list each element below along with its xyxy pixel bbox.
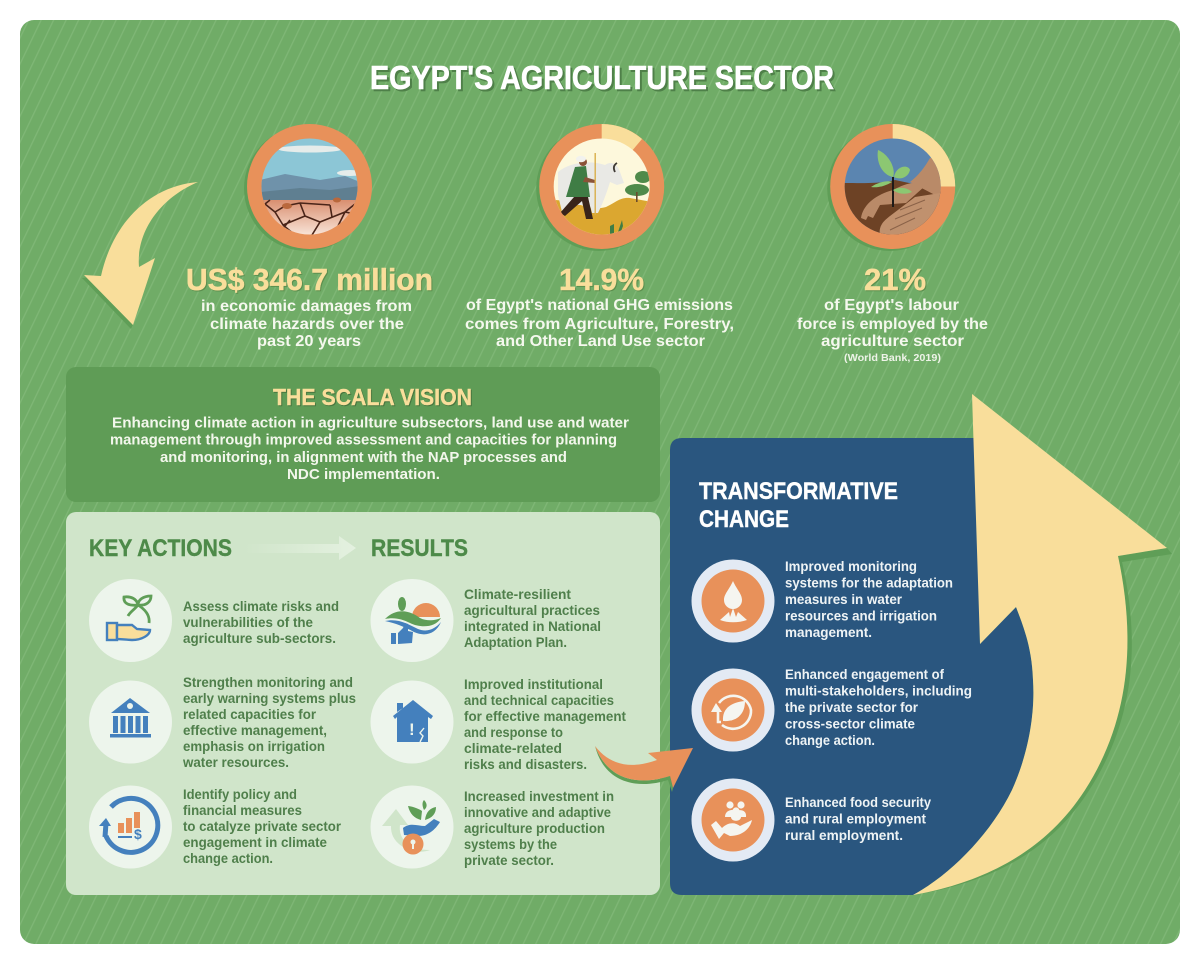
result 1 text: agricultural practices xyxy=(464,603,600,618)
action 3 text: Identify policy and xyxy=(183,787,297,802)
stat 3: text xyxy=(797,262,988,364)
transformative item 1 text: resources and irrigation xyxy=(785,608,937,624)
stat 2: text xyxy=(465,262,734,350)
action 1 text: Assess climate risks and xyxy=(183,599,339,614)
stat 1: climate damage photo ring xyxy=(244,124,372,251)
transformative item 3 text: Enhanced food security xyxy=(785,795,932,810)
result 2 text: Improved institutional xyxy=(464,677,603,692)
icon: house with alert xyxy=(370,680,454,764)
transformative item 3 text: and rural employment xyxy=(785,812,927,826)
panel: the SCALA vision: Enhancing climate action in agriculture subsectors, land use and water xyxy=(112,414,629,432)
stat 3: text: (World Bank, 2019) xyxy=(844,353,941,364)
action 1 text xyxy=(183,599,339,646)
panel: the SCALA vision: NDC implementation. xyxy=(287,466,440,483)
panel: transformative change: TRANSFORMATIVE xyxy=(699,478,898,505)
stat 2: herder and ox ring xyxy=(536,124,664,251)
heading: results: RESULTS xyxy=(371,535,468,562)
title: EGYPT'S AGRICULTURE SECTOR xyxy=(370,59,834,96)
arrow: large yellow upward curved arrow xyxy=(913,394,1172,895)
stat 3: text: force is employed by the xyxy=(797,316,988,333)
result 3 text xyxy=(464,789,614,868)
result 3 text: innovative and adaptive xyxy=(464,805,611,820)
icon: hand with seedling xyxy=(89,579,172,662)
stat 2: text: comes from Agriculture, Forestry, xyxy=(465,316,734,333)
action 2 text: effective management, xyxy=(183,723,327,738)
icon: water drop and grass xyxy=(692,560,774,642)
icon: investment hand with plant xyxy=(370,786,454,868)
stat 1: text: US$ 346.7 million xyxy=(187,263,434,298)
title: EGYPT'S AGRICULTURE SECTOR xyxy=(372,61,836,98)
action 2 text: water resources. xyxy=(182,755,289,770)
transformative item 2 text: the private sector for xyxy=(785,700,919,715)
icon: institution building xyxy=(89,680,172,764)
action 3 text xyxy=(183,787,342,866)
action 3 text: financial measures xyxy=(183,803,302,818)
stat 3: text: of Egypt's labour xyxy=(824,297,959,314)
stat 2: text: and Other Land Use sector xyxy=(496,333,705,350)
transformative item 1 text: measures in water xyxy=(785,592,903,607)
stat 1: text: in economic damages from xyxy=(201,298,412,315)
result 3 text: Increased investment in xyxy=(464,789,614,804)
transformative item 1 text: Improved monitoring xyxy=(785,559,917,574)
icon: finance cycle chart xyxy=(89,786,172,868)
result 2 text: risks and disasters. xyxy=(464,757,587,772)
icon: people in hand xyxy=(692,778,774,862)
transformative item 2 text: change action. xyxy=(785,733,875,748)
result 1 text: Adaptation Plan. xyxy=(464,635,567,650)
action 1 text: vulnerabilities of the xyxy=(183,615,313,630)
transformative item 3 text: rural employment. xyxy=(785,828,903,843)
transformative item 1 text: management. xyxy=(785,625,872,640)
stat 1: text xyxy=(186,262,434,350)
arrow: yellow down-left curved arrow xyxy=(82,182,198,329)
action 3 text: engagement in climate xyxy=(183,835,327,850)
result 1 text: Climate-resilient xyxy=(464,587,572,602)
action 2 text xyxy=(182,675,356,770)
transformative item 2 text xyxy=(785,667,972,748)
panel: transformative change: CHANGE xyxy=(699,506,789,533)
result 1 text: integrated in National xyxy=(464,619,601,634)
result 3 text: systems by the xyxy=(464,837,557,852)
result 3 text: agriculture production xyxy=(464,821,605,836)
result 1 text xyxy=(464,587,601,650)
arrow: key actions to results xyxy=(244,536,356,560)
result 3 text: private sector. xyxy=(464,853,554,868)
stat 3: text: 21% xyxy=(864,262,926,297)
action 2 text: Strengthen monitoring and xyxy=(183,675,353,690)
arrow: orange results to transformative change xyxy=(595,746,693,792)
panel: the SCALA vision: THE SCALA VISION xyxy=(273,384,472,410)
panel: the SCALA vision xyxy=(66,367,660,502)
action 2 text: early warning systems plus xyxy=(183,691,356,706)
stat 1: text: past 20 years xyxy=(257,333,361,350)
result 2 text: for effective management xyxy=(464,709,627,724)
transformative item 2 text: multi-stakeholders, including xyxy=(785,684,972,698)
stat 2: text: 14.9% xyxy=(559,262,644,297)
panel: transformative change xyxy=(670,438,1033,895)
stat 3: text: agriculture sector xyxy=(821,333,964,350)
action 3 text: change action. xyxy=(183,851,273,866)
result 2 text xyxy=(464,677,627,772)
action 2 text: related capacities for xyxy=(183,707,317,722)
stat 3: seedling in hands ring xyxy=(827,124,955,251)
action 1 text: agriculture sub-sectors. xyxy=(183,631,336,646)
icon: landscape with thumbs up xyxy=(370,579,454,662)
action 2 text: emphasis on irrigation xyxy=(183,739,325,754)
icon: house with alert: ! xyxy=(409,720,415,739)
transformative item 1 text: systems for the adaptation xyxy=(785,576,953,590)
transformative item 1 text xyxy=(785,559,953,640)
result 2 text: and technical capacities xyxy=(464,693,614,708)
transformative item 2 text: Enhanced engagement of xyxy=(785,667,945,682)
stat 3: text: 21% xyxy=(865,263,927,298)
icon: finance cycle chart: $ xyxy=(134,826,142,842)
icon: leaf in cycle xyxy=(692,668,774,752)
panel: the SCALA vision: and monitoring, in alignment with the NAP processes and xyxy=(160,449,567,466)
stat 2: text: 14.9% xyxy=(560,263,645,298)
transformative item 2 text: cross-sector climate xyxy=(785,716,915,732)
stat 2: text: of Egypt's national GHG emissions xyxy=(466,297,733,314)
heading: key actions: KEY ACTIONS xyxy=(89,535,232,562)
stat 1: text: climate hazards over the xyxy=(210,316,404,333)
transformative item 3 text xyxy=(785,795,932,843)
result 2 text: climate-related xyxy=(464,741,562,756)
panel: the SCALA vision: THE SCALA VISION xyxy=(274,385,473,411)
action 3 text: to catalyze private sector xyxy=(183,819,342,834)
panel: key actions and results xyxy=(66,512,660,895)
stat 1: text: US$ 346.7 million xyxy=(186,262,433,297)
result 2 text: and response to xyxy=(464,725,563,740)
panel: the SCALA vision: management through improved assessment and capacities for planning xyxy=(110,432,617,448)
